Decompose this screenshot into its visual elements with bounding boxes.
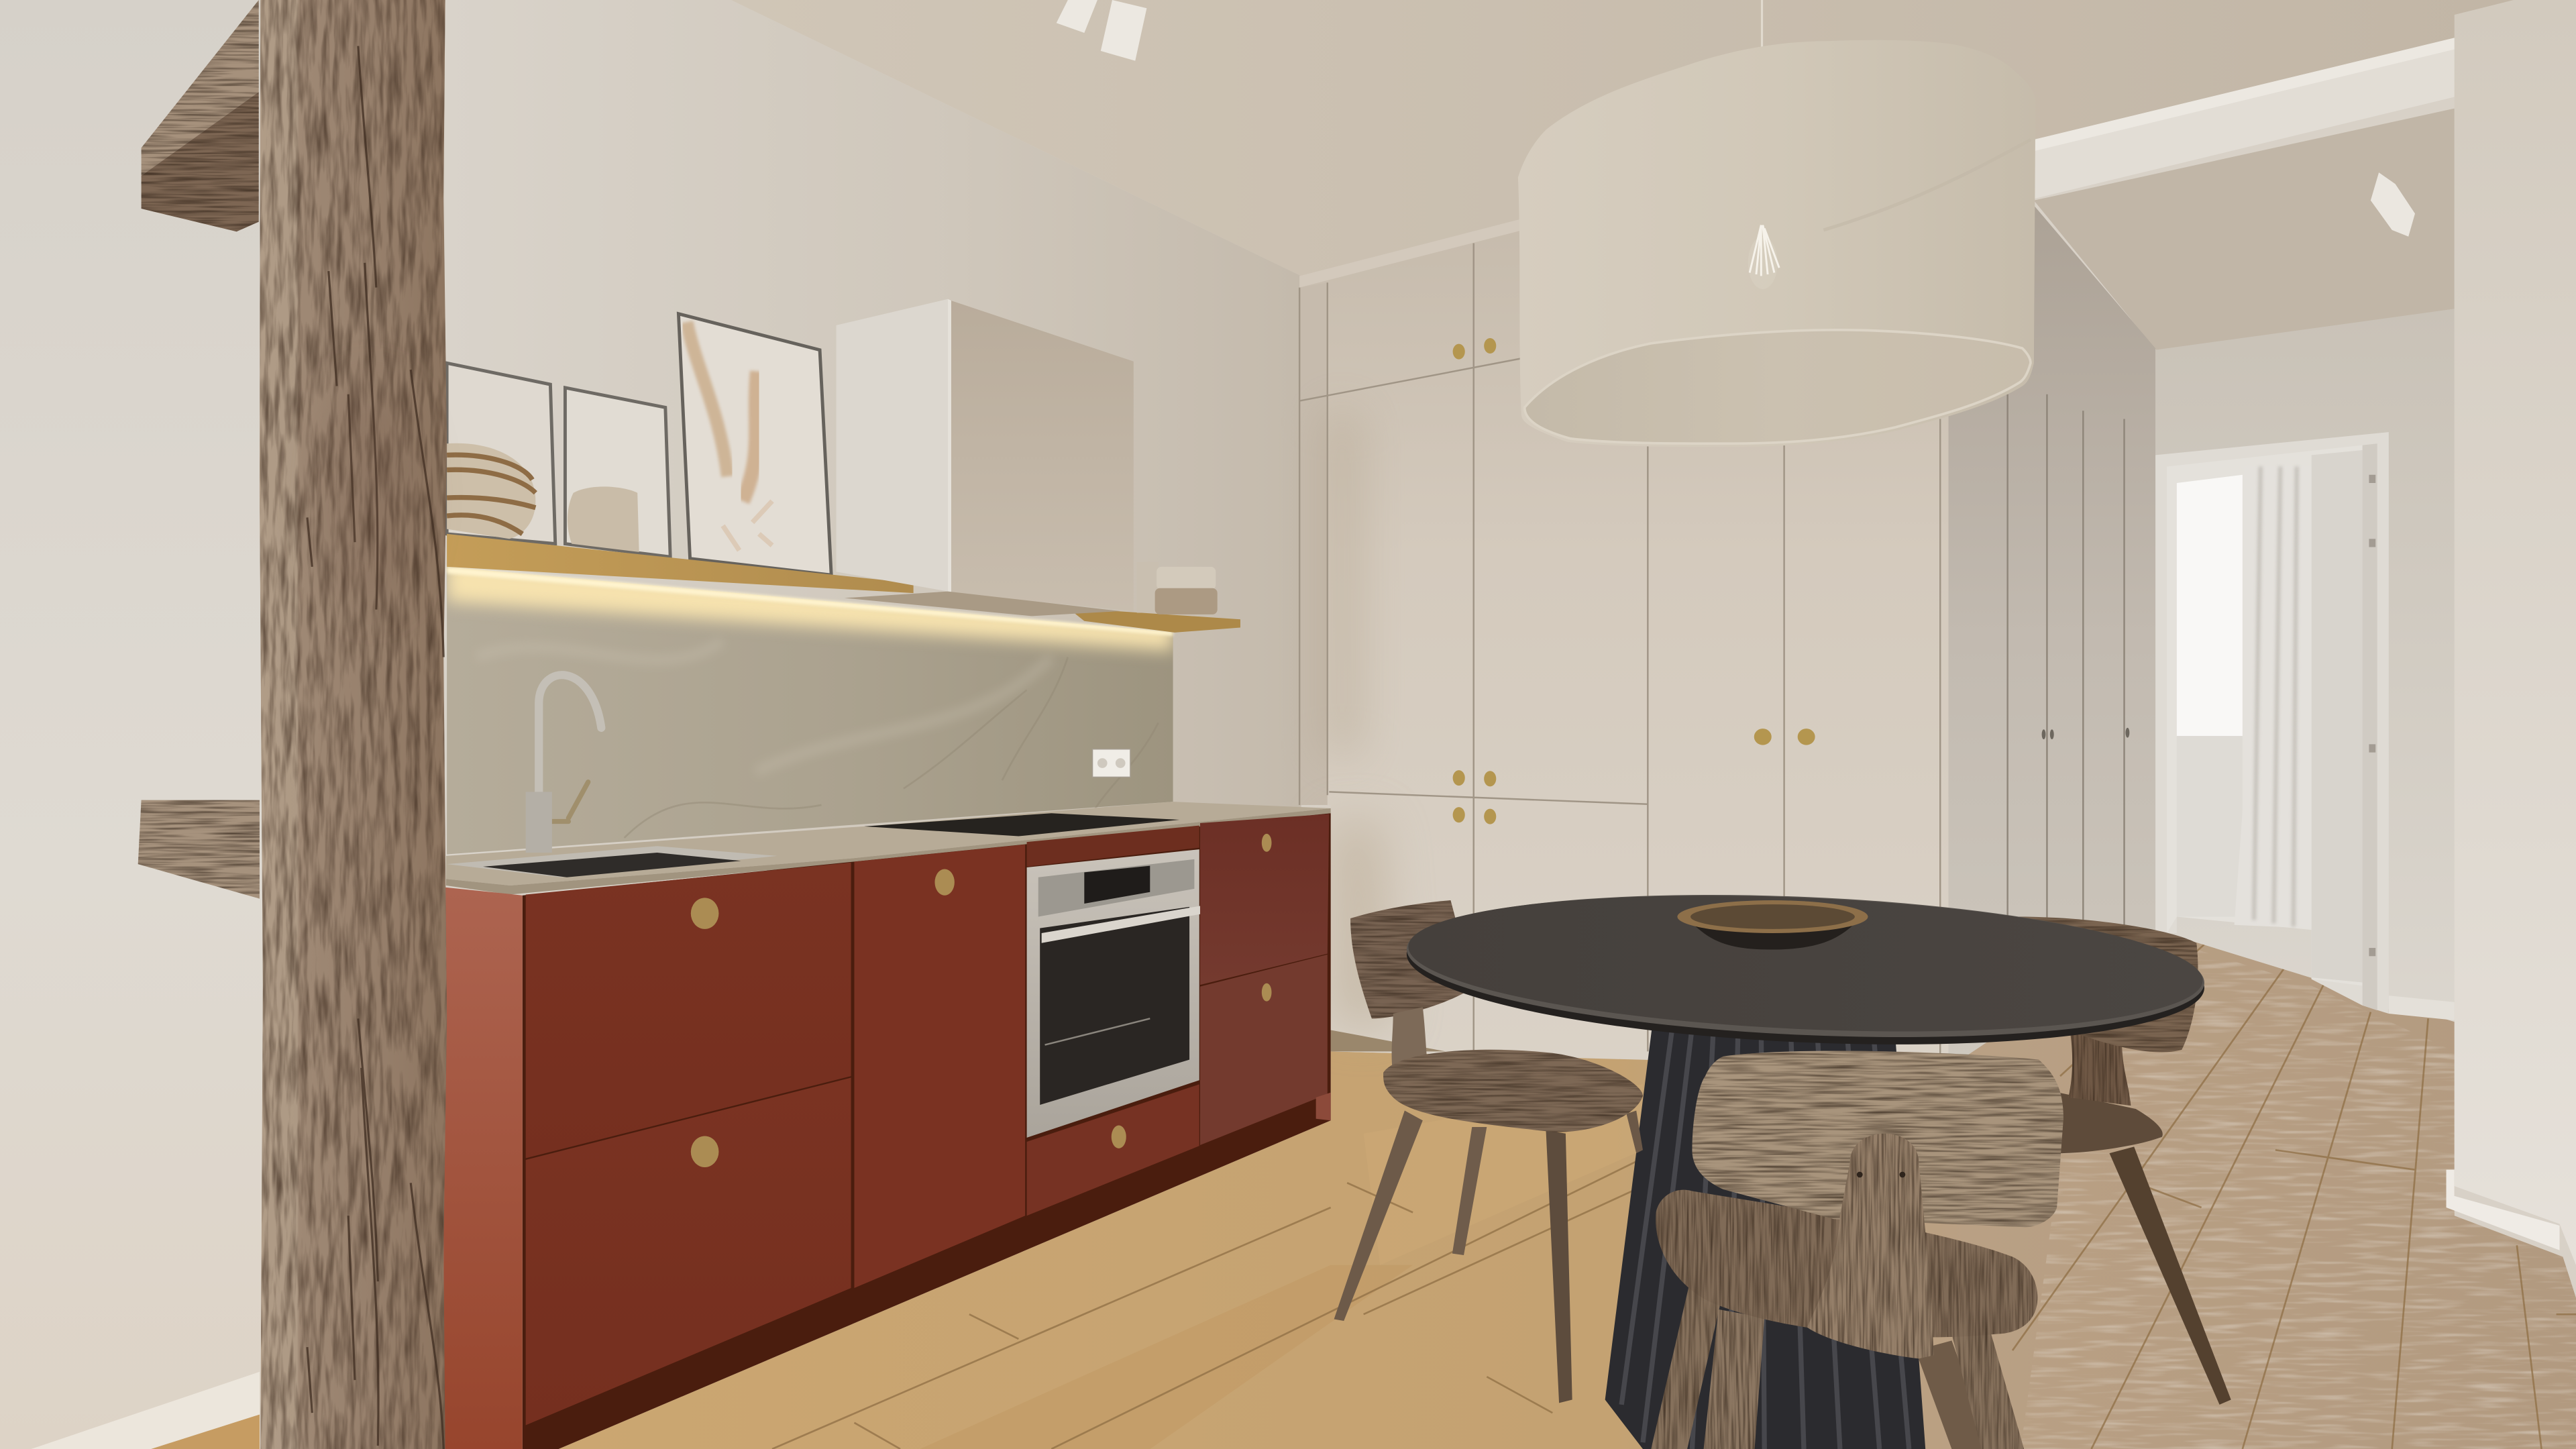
drawer below oven bbox=[1027, 1084, 1199, 1216]
oven handle bbox=[1042, 905, 1204, 943]
wall socket bbox=[1093, 749, 1130, 777]
bowl bbox=[1677, 900, 1868, 950]
post dark patch bbox=[321, 378, 419, 608]
curtain bbox=[2235, 467, 2312, 928]
oven bbox=[1027, 849, 1204, 1138]
lamp inner underside bbox=[1525, 330, 2031, 443]
left baseboard bbox=[32, 1372, 260, 1449]
tall door bbox=[854, 845, 1025, 1288]
door edge bbox=[2363, 443, 2377, 1010]
doorway bbox=[2155, 432, 2389, 1014]
backsplash bbox=[447, 559, 1173, 854]
floor behind post bbox=[151, 1415, 260, 1449]
room lower wall bbox=[2177, 736, 2243, 917]
cabinet carcass shadow bbox=[523, 813, 1331, 1449]
door seams bbox=[1299, 243, 1940, 1068]
curtain folds bbox=[2254, 467, 2297, 926]
stone vase bbox=[568, 486, 639, 552]
table base bbox=[1605, 1022, 1925, 1449]
front chair seat bbox=[1656, 1190, 2037, 1337]
floor plank tones bbox=[920, 1084, 1643, 1449]
pendant drum lamp bbox=[1518, 40, 2035, 447]
room right wall bbox=[2312, 450, 2363, 982]
rear leg bbox=[2109, 1146, 2231, 1405]
hallway spotlight bbox=[2371, 172, 2415, 237]
cabinet shadow bbox=[1328, 411, 1357, 756]
chair post bbox=[1392, 1007, 1430, 1076]
spine bolts bbox=[1857, 1172, 1905, 1177]
window glow bbox=[2177, 475, 2243, 736]
lower cabinet shadow bbox=[1331, 821, 1397, 1027]
white ceiling beam bbox=[2034, 38, 2455, 199]
kitchen base cabinets bbox=[443, 813, 1331, 1449]
left filler strip bbox=[1299, 282, 1328, 805]
oven rack bbox=[1045, 1018, 1150, 1045]
post cracks bbox=[307, 46, 443, 1449]
seat bbox=[2059, 1093, 2163, 1153]
light strip bbox=[447, 567, 1173, 636]
jars on shelf bbox=[1137, 562, 1218, 614]
extractor hood underside bbox=[845, 592, 1120, 616]
lower beam stub bbox=[138, 800, 260, 899]
back post bbox=[2068, 1032, 2131, 1106]
lamp bulb bbox=[1748, 225, 1779, 289]
column baseboard bbox=[2447, 1170, 2560, 1250]
wooden post bbox=[260, 0, 447, 1449]
picture frame right with pampas bbox=[678, 314, 831, 575]
floating shelf left bbox=[447, 534, 914, 593]
hob bbox=[864, 813, 1179, 837]
cabinet brass knobs bbox=[1453, 338, 1815, 824]
right upper drawer bbox=[1200, 814, 1329, 985]
side wardrobe bbox=[1948, 205, 2155, 1068]
picture frame left bbox=[447, 363, 555, 544]
wall cupboard bbox=[837, 299, 1134, 611]
floor bbox=[559, 920, 2576, 1449]
hallway baseboard bbox=[2389, 996, 2455, 1020]
front chair legs bbox=[1651, 1287, 1722, 1449]
front chair backrest bbox=[1692, 1051, 2063, 1227]
cabinet bulkhead bbox=[1299, 219, 1523, 288]
track spotlights bbox=[1057, 0, 1146, 61]
front chair bbox=[1651, 1051, 2063, 1449]
hallway ceiling bbox=[2034, 109, 2455, 354]
lamp cloth fold bbox=[1823, 140, 2031, 230]
brass handles bbox=[691, 834, 1272, 1167]
patterned vase bbox=[447, 443, 535, 539]
hallway wall bbox=[2155, 309, 2455, 1022]
left chair backrest bbox=[1350, 900, 1474, 1076]
right foreground column bbox=[2455, 0, 2576, 1265]
wardrobe knobs bbox=[2042, 728, 2129, 739]
panel above oven bbox=[1027, 826, 1199, 867]
floor grain highlights bbox=[2021, 936, 2576, 1449]
backrest bbox=[2019, 917, 2198, 1052]
upper drawer bbox=[526, 863, 851, 1159]
front chair spine bbox=[1807, 1134, 1933, 1358]
faucet bbox=[526, 675, 601, 853]
sink bbox=[447, 846, 777, 877]
right lower drawer bbox=[1200, 955, 1328, 1145]
ceiling bbox=[731, 0, 2514, 276]
picture frame middle bbox=[565, 388, 670, 557]
under-shelf glow bbox=[447, 559, 1173, 651]
upper beam stub bbox=[142, 0, 259, 231]
left wall bbox=[0, 0, 263, 1449]
pendant lamp cord bbox=[1762, 0, 1763, 225]
end panel foot bbox=[1316, 1093, 1331, 1120]
marble veins bbox=[625, 657, 1159, 838]
lower drawer bbox=[526, 1078, 851, 1425]
tall cabinet wall bbox=[1299, 213, 1948, 1068]
door hinges bbox=[2369, 475, 2375, 956]
cabinet plinth bbox=[1331, 1030, 1446, 1051]
countertop bbox=[446, 802, 1331, 894]
floating shelf right bbox=[1068, 608, 1240, 633]
right chair bbox=[2019, 917, 2231, 1405]
side panel bbox=[443, 887, 523, 1449]
table top bbox=[1403, 879, 2208, 1060]
floor plank joints bbox=[772, 920, 2576, 1449]
left chair seat and legs bbox=[1334, 1050, 1643, 1403]
kitchen back wall bbox=[445, 0, 1301, 857]
